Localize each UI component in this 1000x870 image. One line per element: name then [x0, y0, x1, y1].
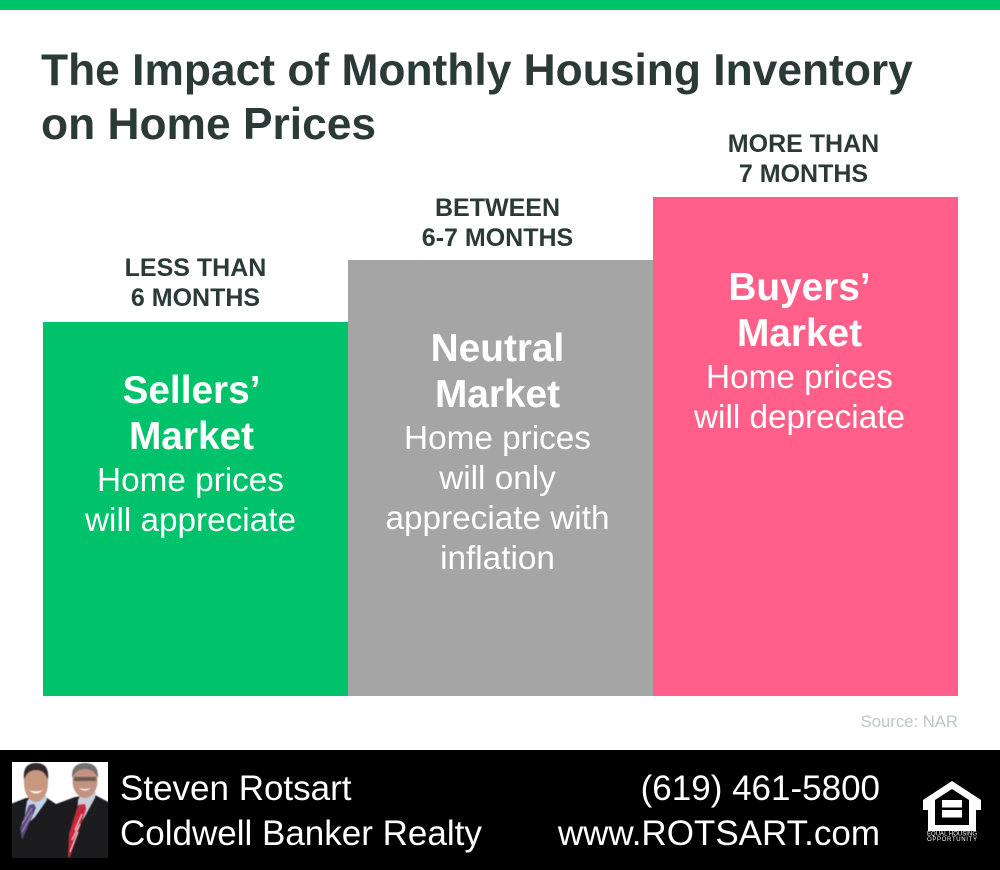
label: more than 7 months: 7 MONTHS [739, 160, 868, 188]
text: sellers' description: Home prices [97, 462, 284, 499]
title [41, 46, 913, 149]
label: more than 7 months [728, 130, 879, 188]
phone: (619) 461-5800 [641, 769, 880, 808]
footer band [0, 750, 1000, 870]
heading: sellers' market: Market [129, 415, 254, 458]
panel: sellers' market [43, 322, 348, 696]
heading: neutral market: Market [435, 373, 560, 416]
heading: neutral market: Neutral [431, 327, 564, 370]
panel: neutral market [348, 260, 653, 696]
text: buyers' description: Home prices [706, 359, 893, 396]
text: neutral description: appreciate with [386, 500, 609, 537]
panel: buyers' market [653, 197, 958, 696]
text: neutral description: Home prices [404, 420, 591, 457]
label: less than 6 months [125, 254, 266, 312]
text: sellers' description: will appreciate [85, 502, 296, 539]
text: buyers' description [694, 359, 905, 436]
top accent bar [0, 0, 1000, 10]
text: buyers' description: will depreciate [694, 399, 905, 436]
icon: equal housing opportunity [923, 781, 981, 842]
label: between 6-7 months: 6-7 MONTHS [422, 224, 573, 252]
heading: buyers' market: Market [737, 312, 862, 355]
text: neutral description: inflation [440, 540, 555, 577]
text: neutral description: will only [439, 460, 556, 497]
heading: buyers' market: Buyers’ [728, 266, 871, 309]
agent name: Steven Rotsart [120, 769, 352, 808]
label: more than 7 months: MORE THAN [728, 130, 879, 158]
text: sellers' description [85, 462, 296, 539]
label: between 6-7 months: BETWEEN [435, 194, 560, 222]
source note: Source: NAR [861, 712, 958, 731]
heading: neutral market [431, 327, 564, 416]
website: www.ROTSART.com [558, 814, 880, 853]
label: less than 6 months: 6 MONTHS [131, 284, 260, 312]
brokerage: Coldwell Banker Realty [120, 814, 482, 853]
title: The Impact of Monthly Housing Inventory [41, 46, 913, 95]
photo: two agents [12, 762, 108, 858]
label: less than 6 months: LESS THAN [125, 254, 266, 282]
title: on Home Prices [41, 100, 376, 149]
heading: buyers' market [728, 266, 871, 355]
label: between 6-7 months [422, 194, 573, 252]
heading: sellers' market [122, 369, 261, 458]
icon: equal housing opportunity: EQUAL HOUSING [927, 832, 977, 838]
text: neutral description [386, 420, 609, 577]
heading: sellers' market: Sellers’ [122, 369, 261, 412]
